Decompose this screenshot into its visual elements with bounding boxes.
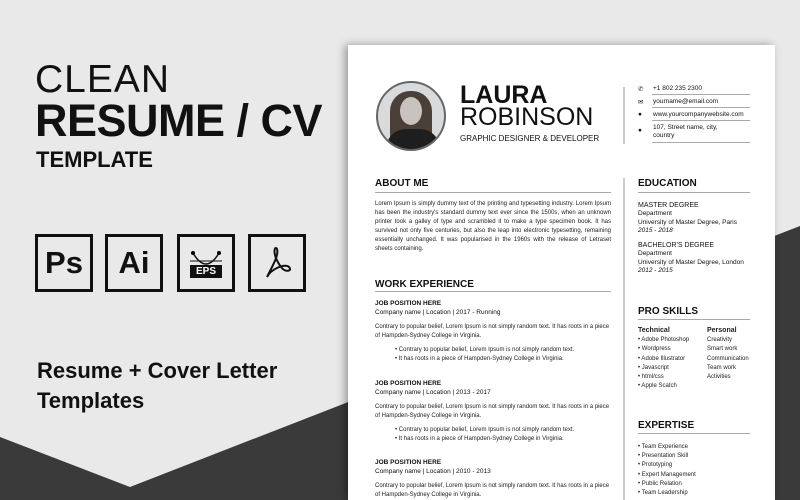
education: 2012 - 2015 (638, 267, 673, 274)
work experience: • It has roots in a piece of Hampden-Sydney College in Virginia. (395, 436, 564, 442)
icon: Ai: Ai (118, 245, 150, 280)
expertise: • Team Leadership (638, 490, 688, 496)
title (35, 58, 322, 172)
work experience: • It has roots in a piece of Hampden-Sydney College in Virginia. (395, 356, 564, 362)
expertise: • Presentation Skill (638, 453, 688, 459)
pro skills: Team work (707, 365, 736, 371)
about me: Lorem Ipsum is simply dummy text of the printing and typesetting industry. Lorem Ipsum has been the industry's standard dummy text ever since the 1500s, when an unknown printer took a galley of type and scrambled it to make a type specimen book. It has survived not only five centuries, but also the leap into electronic typesetting, remaining essentially unchanged. It was popularised in the 1960s with the release of Letraset sheets containing. (375, 201, 611, 252)
work experience: of Hampden-Sydney College in Virginia. (375, 492, 481, 498)
pro skills: • Wordpress (638, 346, 671, 352)
work experience: JOB POSITION HERE (375, 459, 441, 466)
title: CLEAN (35, 58, 170, 101)
icon: EPS: EPS (196, 266, 216, 276)
pro skills: • Adobe Photoshop (638, 337, 689, 343)
name: ROBINSON (460, 103, 593, 131)
education: 2015 - 2018 (638, 227, 673, 234)
contact: ✉ (638, 99, 643, 106)
education: Department (638, 210, 672, 217)
icon: Ps (35, 234, 93, 292)
title: RESUME / CV (35, 95, 322, 146)
subtitle: Templates (37, 388, 144, 413)
education (638, 178, 750, 274)
contact: yourname@email.com (653, 98, 718, 105)
expertise (638, 420, 750, 496)
title: TEMPLATE (36, 147, 153, 172)
about me: ABOUT ME (375, 178, 428, 189)
expertise: • Expert Management (638, 472, 696, 478)
work experience (375, 279, 611, 498)
pro skills: Technical (638, 327, 670, 334)
expertise: EXPERTISE (638, 420, 694, 431)
subtitle (37, 358, 277, 413)
icons row (35, 234, 306, 292)
contact: ● (638, 111, 642, 118)
education: University of Master Degree, London (638, 259, 744, 266)
work experience: Contrary to popular belief, Lorem Ipsum is not simply random text. It has roots in a piece (375, 404, 609, 410)
pro skills: PRO SKILLS (638, 306, 698, 317)
icon: EPS (177, 234, 235, 292)
pro skills: • Apple Scatch (638, 383, 677, 389)
work experience: of Hampden-Sydney College in Virginia. (375, 332, 481, 338)
education: BACHELOR'S DEGREE (638, 242, 714, 249)
name: LAURA (460, 81, 548, 109)
icon: Ai (105, 234, 163, 292)
work experience: Company name | Location | 2017 - Running (375, 308, 501, 316)
expertise: • Public Relation (638, 481, 682, 487)
contact: ● (638, 127, 642, 134)
pro skills: Smart work (707, 346, 737, 352)
photo (376, 81, 446, 151)
pro skills: • Javascript (638, 365, 669, 371)
work experience: • Contrary to popular belief, Lorem Ipsum is not simply random text. (395, 347, 574, 353)
pro skills: • Adobe Illustrator (638, 356, 685, 362)
pro skills: Personal (707, 327, 737, 334)
icon: Ps: Ps (45, 245, 83, 280)
work experience: • Contrary to popular belief, Lorem Ipsum is not simply random text. (395, 427, 574, 433)
education: Department (638, 250, 672, 257)
name (460, 81, 599, 143)
work experience: WORK EXPERIENCE (375, 279, 474, 290)
name: GRAPHIC DESIGNER & DEVELOPER (460, 134, 599, 143)
pro skills: • html/css (638, 374, 664, 380)
expertise: • Team Experience (638, 444, 688, 450)
contact (638, 85, 750, 143)
expertise: • Prototyping (638, 462, 672, 468)
panel: resume paper (348, 45, 775, 500)
education: University of Master Degree, Paris (638, 219, 737, 226)
education: EDUCATION (638, 178, 697, 189)
contact: 107, Street name, city, (653, 124, 718, 131)
work experience: Contrary to popular belief, Lorem Ipsum is not simply random text. It has roots in a piece (375, 324, 609, 330)
contact: ✆ (638, 86, 643, 93)
work experience: Company name | Location | 2010 - 2013 (375, 468, 491, 474)
contact: +1 802 235 2300 (653, 85, 702, 92)
work experience: JOB POSITION HERE (375, 300, 441, 307)
work experience: Company name | Location | 2013 - 2017 (375, 388, 491, 396)
pro skills: Communication (707, 356, 749, 362)
about me (375, 178, 611, 252)
work experience: Contrary to popular belief, Lorem Ipsum is not simply random text. It has roots in a piece (375, 483, 609, 489)
contact: www.yourcompanywebsite.com (653, 111, 744, 118)
work experience: of Hampden-Sydney College in Virginia. (375, 412, 481, 418)
education: MASTER DEGREE (638, 202, 699, 209)
pro skills: Activities (707, 374, 731, 380)
work experience: JOB POSITION HERE (375, 380, 441, 387)
pro skills (638, 306, 750, 389)
subtitle: Resume + Cover Letter (37, 358, 277, 383)
pro skills: Creativity (707, 337, 732, 343)
contact: country (653, 132, 674, 139)
icon: PDF (248, 234, 306, 292)
